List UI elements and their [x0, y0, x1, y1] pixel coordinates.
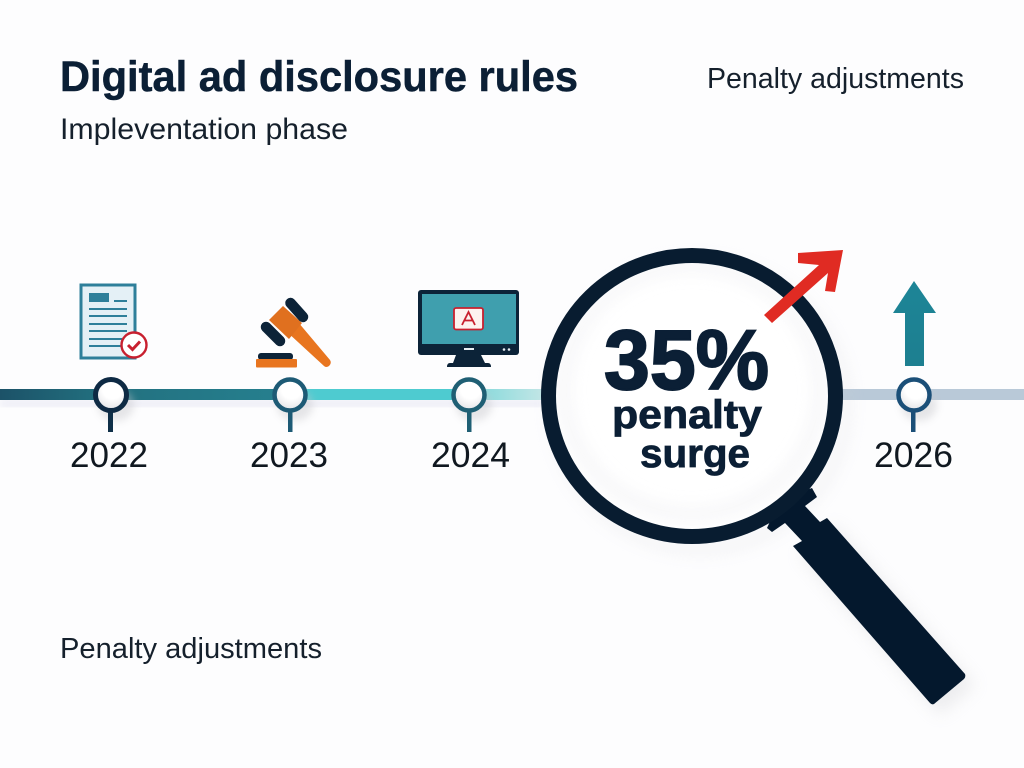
title: Digital ad disclosure rules [60, 53, 578, 101]
timeline track [0, 389, 1024, 406]
milestone 2022 [70, 285, 148, 475]
subtitle: implementation phase: Impleventation phase [60, 113, 348, 146]
year 2022: 2022 [70, 436, 148, 475]
label: penalty adjustments top right: Penalty adjustments [707, 63, 964, 95]
callout: 35% penalty surge: surge [640, 432, 750, 476]
magnifying glass [548, 255, 975, 715]
year 2026: 2026 [874, 436, 953, 475]
callout: 35% penalty surge: penalty [612, 393, 763, 437]
milestone 2026 [874, 281, 953, 475]
year 2024: 2024 [431, 436, 510, 475]
callout: 35% penalty surge [604, 313, 769, 476]
label: penalty adjustments bottom left: Penalty adjustments [60, 633, 322, 665]
callout: 35% penalty surge: 35% [604, 313, 769, 407]
icon: document with check [81, 285, 146, 358]
milestone 2023 [250, 303, 331, 475]
node 2022 [96, 380, 134, 432]
node 2026 [898, 380, 937, 432]
node 2024 [454, 380, 492, 432]
icon: gavel [256, 303, 331, 368]
icon: red trend arrow [764, 250, 843, 323]
node 2023 [274, 380, 313, 432]
milestone 2024 [418, 290, 519, 475]
year 2023: 2023 [250, 436, 328, 475]
icon: monitor with ad [418, 290, 519, 367]
icon: teal up arrow [893, 281, 936, 366]
